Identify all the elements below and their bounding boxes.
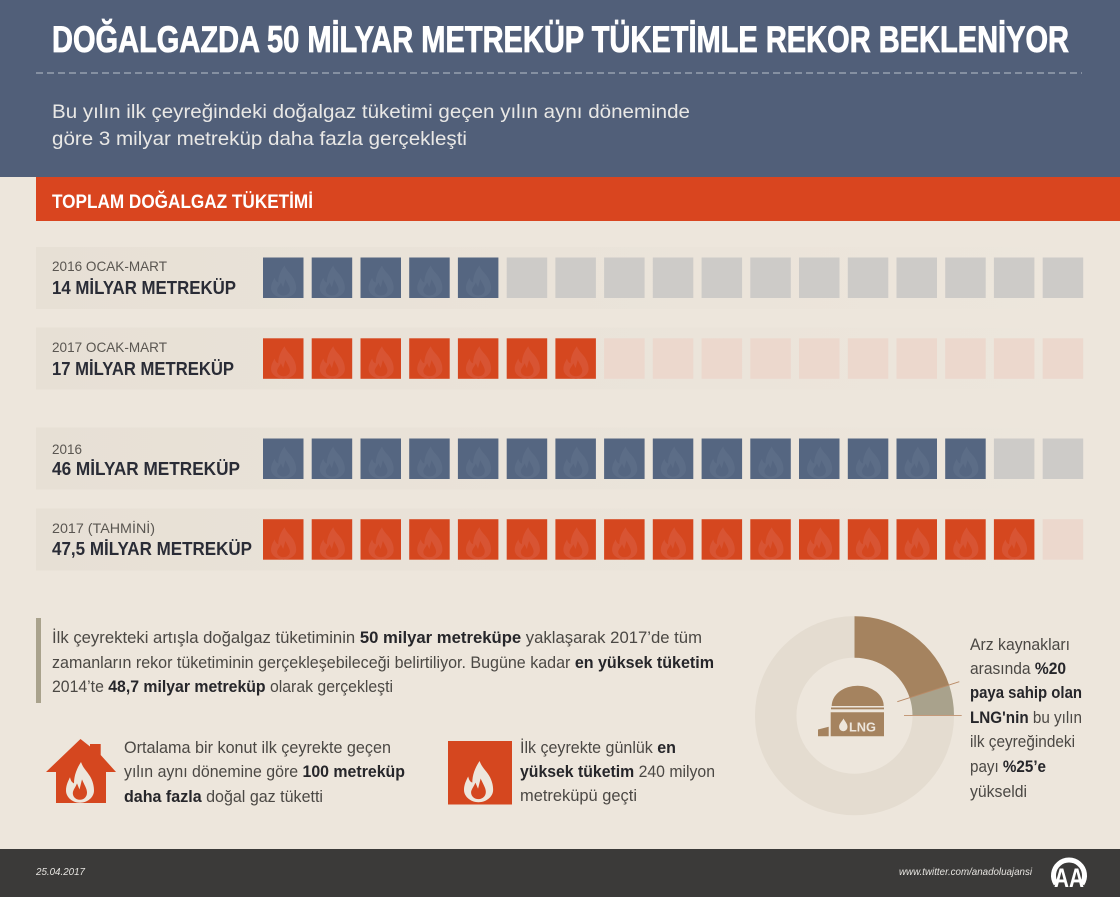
icon row: 7 of 17 filled (263, 338, 1083, 379)
subtitle (52, 101, 690, 150)
donut chart: LNG share (776, 616, 962, 794)
row label (52, 441, 240, 479)
text: daily peak consumption: İlk çeyrekte günlük en (520, 738, 676, 757)
text: LNG share description: ilk çeyreğindeki (970, 732, 1075, 751)
date: 25.04.2017 (35, 866, 86, 878)
social link: www.twitter.com/anadoluajansi (899, 866, 1033, 878)
icon row: 16 of 17 filled (263, 519, 1083, 560)
section heading bar: TOPLAM DOĞALGAZ TÜKETİMİ (52, 191, 313, 213)
text: daily peak consumption: metreküpü geçti (520, 786, 637, 805)
footer (0, 849, 1120, 897)
header background (0, 0, 1120, 177)
panel: 2016 Ocak-Mart row (36, 247, 1096, 309)
callout: record consumption paragraph (36, 618, 714, 703)
text: household consumption: daha fazla doğal gaz tüketti (124, 787, 323, 806)
row label: 46 MİLYAR METREKÜP (52, 459, 240, 479)
panel: 2017 Ocak-Mart row (36, 328, 1096, 390)
text: LNG share description (970, 635, 1082, 801)
panel: 2017 estimate row (36, 508, 1096, 570)
row label: 2016 (52, 441, 82, 457)
icon: flame square (448, 741, 512, 804)
callout: record consumption paragraph: İlk çeyrekteki artışla doğalgaz tüketiminin 50 milyar metreküpe yaklaşarak 2017’de tüm (52, 628, 702, 647)
row label: 14 MİLYAR METREKÜP (52, 278, 236, 298)
row label: 2016 OCAK-MART (52, 258, 167, 274)
slice: increase to 25% (910, 685, 954, 716)
callout: record consumption paragraph: 2014’te 48,7 milyar metreküp olarak gerçekleşti (52, 677, 393, 696)
text: LNG share description: paya sahip olan (970, 683, 1082, 702)
text: LNG share description: Arz kaynakları (970, 635, 1070, 654)
panel: 2016 row (36, 428, 1096, 490)
panel: header (0, 0, 1120, 177)
text: household consumption: Ortalama bir konut ilk çeyrekte geçen (124, 738, 391, 757)
icon: LNG tank (818, 686, 884, 736)
icon row: 15 of 17 filled (263, 438, 1083, 479)
callout: record consumption paragraph: zamanların rekor tüketiminin gerçekleşebileceği belirtiliyor. Bugüne kadar en yüksek tüketim (52, 653, 714, 672)
row label: 2017 OCAK-MART (52, 339, 167, 355)
row label: 2017 (TAHMİNİ) (52, 519, 155, 536)
text: household consumption: yılın aynı dönemine göre 100 metreküp (124, 762, 405, 781)
slice: LNG 20% (854, 616, 949, 698)
ring: remaining share (776, 637, 933, 794)
row label (52, 519, 252, 559)
icon row: 5 of 17 filled (263, 258, 1083, 298)
text: daily peak consumption: yüksek tüketim 240 milyon (520, 762, 715, 781)
text: LNG share description: yükseldi (970, 782, 1027, 801)
text: LNG share description: arasında %20 (970, 659, 1066, 678)
icon: LNG tank: LNG (849, 720, 876, 734)
text: LNG share description: payı %25’e (970, 757, 1046, 776)
row label (52, 339, 234, 379)
icon: house with flame (46, 739, 116, 803)
icon: agency logo: AA (1054, 863, 1084, 893)
row label (52, 258, 236, 298)
text: LNG share description: LNG'nin bu yılın (970, 708, 1082, 727)
section heading bar (36, 177, 1120, 221)
subtitle: göre 3 milyar metreküp daha fazla gerçekleşti (52, 128, 467, 150)
text: daily peak consumption (520, 738, 715, 805)
row label: 17 MİLYAR METREKÜP (52, 359, 234, 379)
subtitle: Bu yılın ilk çeyreğindeki doğalgaz tüketimi geçen yılın aynı döneminde (52, 101, 690, 123)
row label: 47,5 MİLYAR METREKÜP (52, 539, 252, 559)
text: household consumption (124, 738, 405, 806)
